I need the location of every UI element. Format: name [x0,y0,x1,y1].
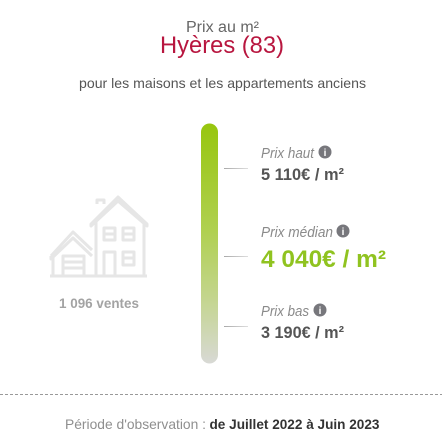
price: high: Prix haut [261,146,315,162]
heading: prix au m2: Prix au m² [186,19,259,36]
price: low: Prix bas [261,304,309,320]
sales count: 1 096 ventes [59,296,139,311]
price: high: 5 110€ / m² [261,166,344,184]
price: high [261,146,344,184]
icon: house [50,197,147,276]
tick: median [224,256,248,257]
tick: low [224,326,248,327]
price: low [261,304,344,342]
price: median: 4 040€ / m² [261,246,386,273]
gauge bar [201,124,218,364]
price: median: Prix médian [261,225,333,241]
icon: info: i [342,227,345,238]
icon: info: i [324,148,327,159]
icon: info: i [319,306,322,317]
footer: observation period: de Juillet 2022 à Juin 2023 [210,416,380,432]
footer: observation period: Période d'observation : [65,416,206,432]
subtitle: pour les maisons et les appartements anciens [79,75,366,91]
title: city: Hyères (83) [160,32,284,59]
price: median [261,224,386,273]
price: low: 3 190€ / m² [261,324,344,342]
footer: observation period [65,416,380,432]
tick: high [224,168,248,169]
header [79,19,366,91]
